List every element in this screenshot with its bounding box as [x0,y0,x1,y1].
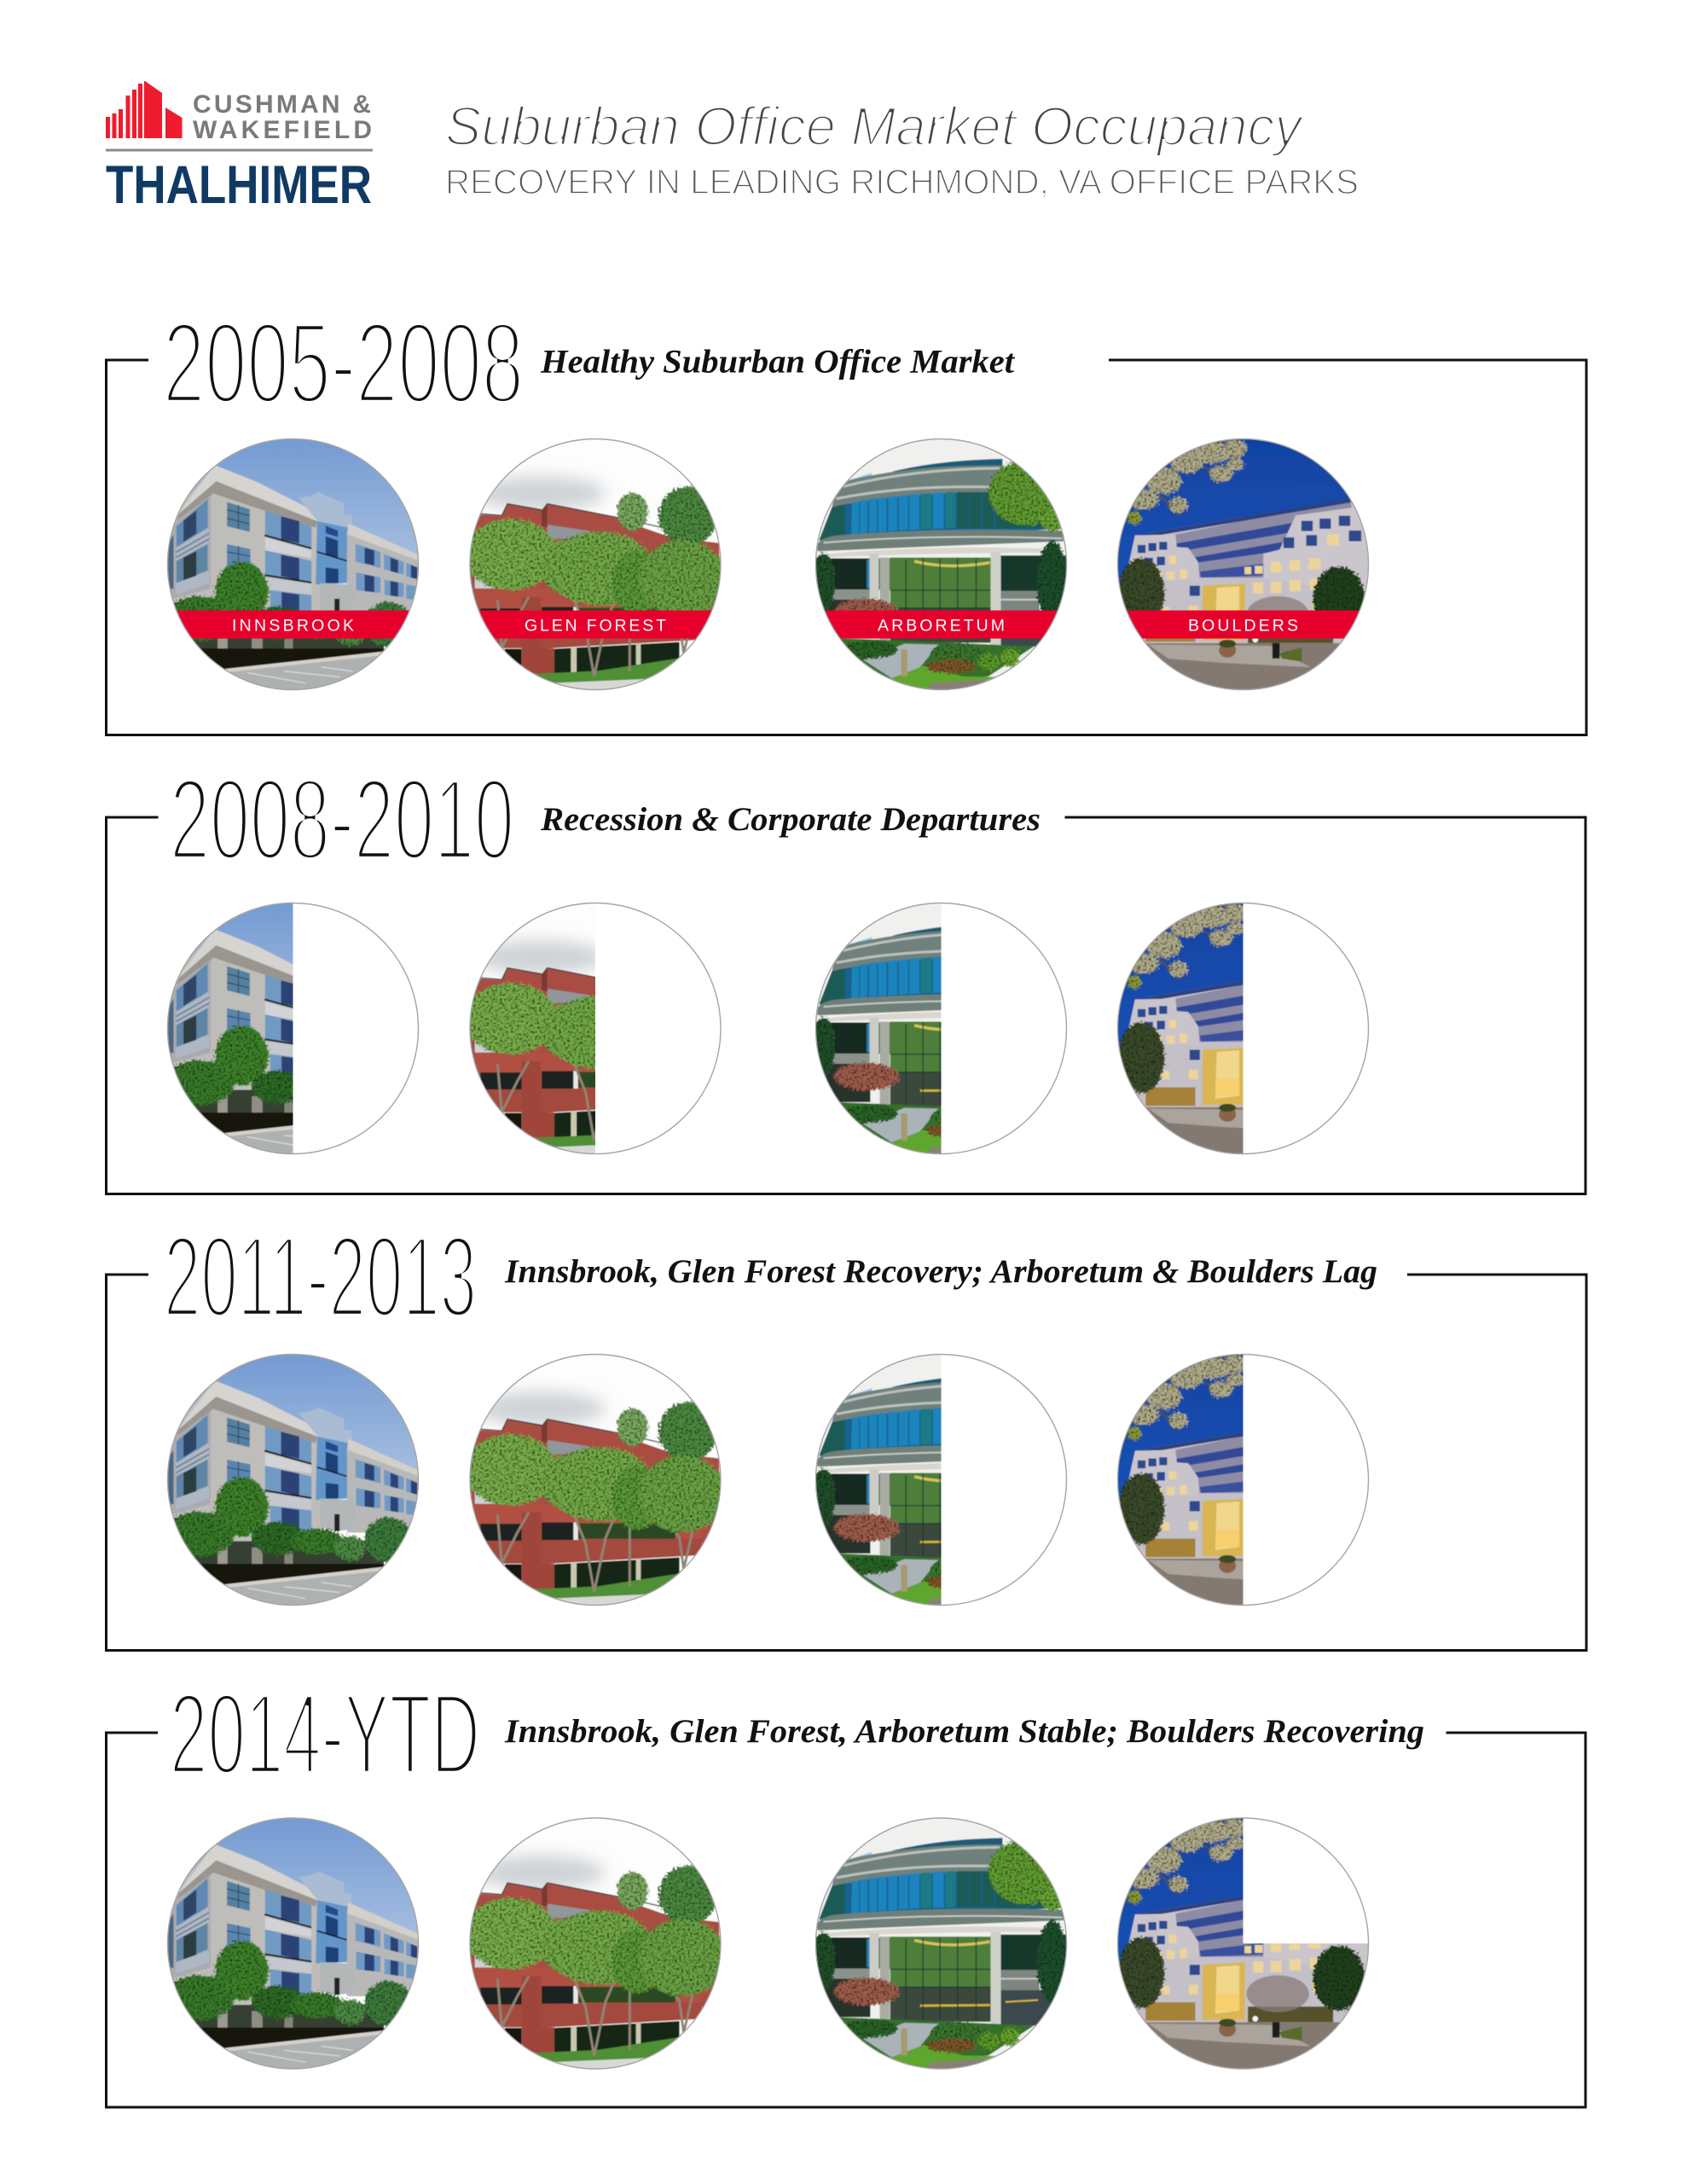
photo: Glen Forest with label [461,429,727,694]
photo: Arboretum half [807,1342,1070,1606]
panel: 2011-2013 [106,1212,1586,1650]
photo: Boulders with label [1117,439,1370,691]
icon: red building [106,81,183,138]
photo: Glen Forest with label: GLEN FOREST [525,616,666,635]
heading: 2011-2013: 2011-2013 [164,1212,477,1341]
heading: 2008-2010: 2008-2010 [170,755,514,884]
panel: 2014-YTD [106,1670,1586,2107]
photo: Boulders three-quarter [1117,1817,1370,2070]
photo: Arboretum full [807,1805,1070,2070]
photo: Arboretum with label [807,427,1070,690]
photo: Innsbrook with label: INNSBROOK [232,616,354,635]
panel: 2008-2010 [106,755,1586,1194]
subheading: Healthy Suburban Office Market [540,343,1015,380]
logo wordmark: Cushman: CUSHMAN & [193,90,371,119]
photo: Glen Forest half [461,893,727,1158]
photo: Innsbrook with label [162,430,426,694]
photo: Glen Forest full [461,1809,727,2073]
title: Suburban Office Market Occupancy [445,96,1305,157]
subheading: Recession & Corporate Departures [540,801,1041,838]
photo: Arboretum half [807,891,1070,1154]
panel: 2005-2008 [106,299,1586,735]
logo wordmark: Thalhimer: THALHIMER [106,155,372,215]
subtitle: RECOVERY IN LEADING RICHMOND, VA OFFICE PARKS [445,162,1359,201]
photo: Innsbrook full [162,1345,426,1609]
subheading: Innsbrook, Glen Forest Recovery; Arboretum & Boulders Lag [504,1253,1377,1290]
photo: Boulders half [1117,903,1370,1155]
photo: Boulders half [1117,1353,1370,1606]
photo: Boulders with label: BOULDERS [1188,616,1298,635]
heading: 2014-YTD: 2014-YTD [170,1670,480,1798]
photo: Innsbrook half [162,894,426,1158]
photo: Glen Forest full [461,1345,727,1609]
heading: 2005-2008: 2005-2008 [163,299,524,427]
photo: Innsbrook full [162,1809,426,2073]
logo wordmark: Wakefield: WAKEFIELD [193,116,372,144]
photo: Arboretum with label: ARBORETUM [878,616,1005,635]
logo: Cushman & Wakefield Thalhimer [106,81,373,215]
subheading: Innsbrook, Glen Forest, Arboretum Stable; Boulders Recovering [504,1713,1424,1750]
